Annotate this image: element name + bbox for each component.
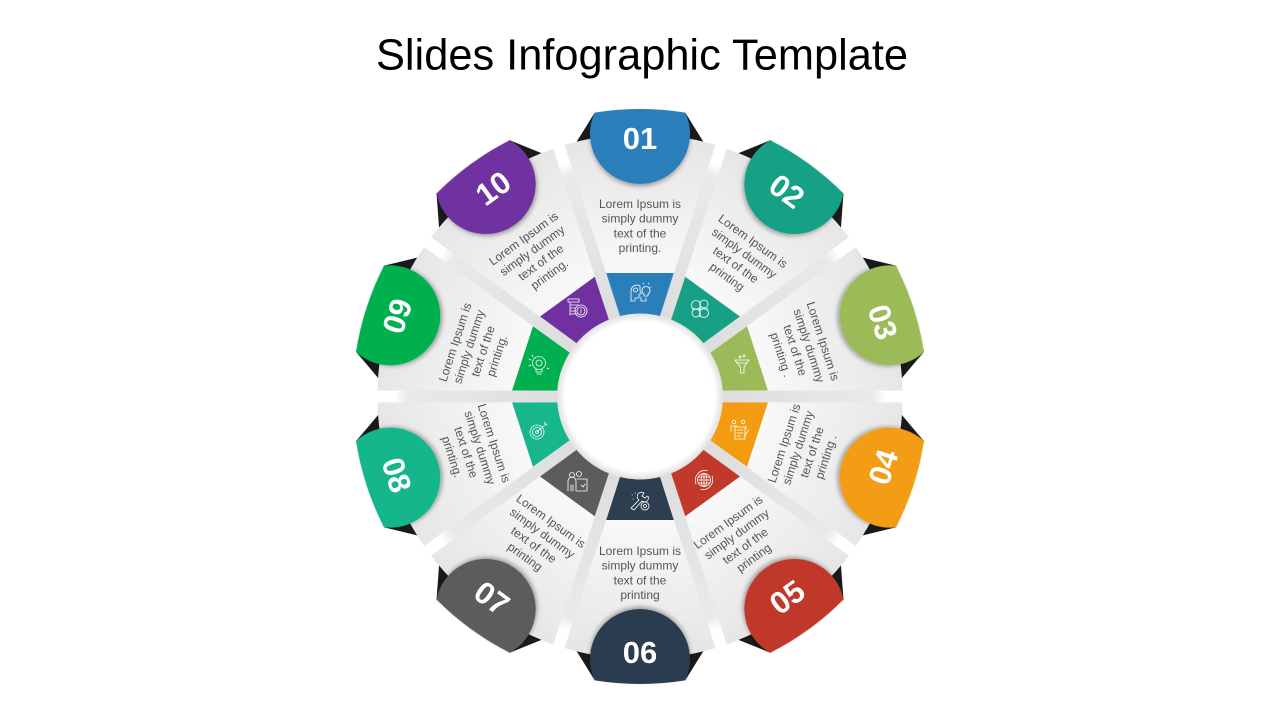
text 04: Lorem Ipsum is <box>765 402 803 484</box>
number 01: 01 <box>623 121 657 156</box>
icon: coins with dollar <box>568 299 587 317</box>
icon: wrench and gear <box>631 492 649 510</box>
wedge 10 shapes <box>410 120 654 376</box>
wedge 05 shapes <box>626 417 870 673</box>
text 06: printing <box>620 588 660 602</box>
text 04: text of the <box>797 425 827 479</box>
text 01: simply dummy <box>602 212 678 226</box>
text 09: Lorem Ipsum is <box>436 301 474 383</box>
text 02: text of the <box>710 244 761 286</box>
text 01: printing. <box>619 241 661 255</box>
number 08: 08 <box>375 453 418 497</box>
wedge 03 shapes <box>693 236 937 443</box>
text 03: simply dummy <box>790 307 827 384</box>
segment 01 <box>564 109 716 316</box>
text 08: Lorem Ipsum is <box>475 402 513 484</box>
text 08: simply dummy <box>461 409 498 486</box>
icon: gear with target <box>530 422 547 439</box>
number 10: 10 <box>469 164 518 213</box>
text 04: simply dummy <box>780 409 817 486</box>
icon: funnel <box>735 355 749 373</box>
text 01: Lorem Ipsum is <box>599 197 681 211</box>
text 02: Lorem Ipsum is <box>716 211 790 271</box>
segment 10 <box>410 120 654 376</box>
icon: globe with arrows <box>695 470 713 490</box>
text 08: printing. <box>439 434 465 479</box>
wedge 09 shapes <box>343 236 587 443</box>
text 04: printing . <box>812 433 840 481</box>
icon: people with checklist <box>731 420 749 439</box>
number 09: 09 <box>376 294 419 338</box>
text 01: text of the <box>614 226 667 240</box>
text 10: Lorem Ipsum is <box>486 209 561 268</box>
segment 08 <box>343 350 587 557</box>
text 02: printing <box>707 260 747 294</box>
wedge 08 shapes <box>343 350 587 557</box>
text 06: text of the <box>614 573 667 587</box>
number 03: 03 <box>861 300 904 344</box>
wedge 07 shapes <box>410 417 654 673</box>
title: Slides Infographic Template <box>376 30 908 80</box>
text 10: printing. <box>528 256 571 293</box>
segment 06 <box>564 477 716 684</box>
number 02: 02 <box>762 167 811 216</box>
segment 02 <box>626 120 870 376</box>
text 10: text of the <box>515 241 566 284</box>
text 05: text of the <box>720 525 771 567</box>
text 07: simply dummy <box>507 505 577 561</box>
soft shadow behind wedges <box>378 134 902 658</box>
text 09: printing. <box>484 333 510 378</box>
text 06: simply dummy <box>602 559 678 573</box>
text 09: simply dummy <box>451 308 488 385</box>
text 06: Lorem Ipsum is <box>599 544 681 558</box>
icon: gears and megaphone <box>692 300 708 318</box>
icon: head with light bulb <box>631 283 651 301</box>
segment 04 <box>693 350 937 557</box>
segment 09 <box>343 236 587 443</box>
number 04: 04 <box>862 445 906 489</box>
text 07: printing <box>505 540 545 574</box>
text 03: printing . <box>767 331 795 379</box>
wedge 02 shapes <box>626 120 870 376</box>
segment 07 <box>410 417 654 673</box>
icon: bulb with gears <box>529 355 549 374</box>
text 03: Lorem Ipsum is <box>804 300 842 382</box>
text 07: text of the <box>508 524 559 566</box>
text 05: printing <box>734 541 774 575</box>
wedge 01 shapes <box>564 109 716 316</box>
number 06: 06 <box>623 635 657 670</box>
number 07: 07 <box>467 574 516 623</box>
text 02: simply dummy <box>709 225 779 281</box>
icon: people with board <box>568 472 587 491</box>
segment 03 <box>693 236 937 443</box>
segment 05 <box>626 417 870 673</box>
text 05: Lorem Ipsum is <box>691 492 765 552</box>
wedge 04 shapes <box>693 350 937 557</box>
text 03: text of the <box>780 323 810 378</box>
text 07: Lorem Ipsum is <box>514 491 588 551</box>
text 10: simply dummy <box>497 222 567 279</box>
text 08: text of the <box>451 425 481 480</box>
number 05: 05 <box>763 573 812 622</box>
text 09: text of the <box>468 324 498 378</box>
wedge 06 shapes <box>564 477 716 684</box>
text 05: simply dummy <box>702 506 772 562</box>
